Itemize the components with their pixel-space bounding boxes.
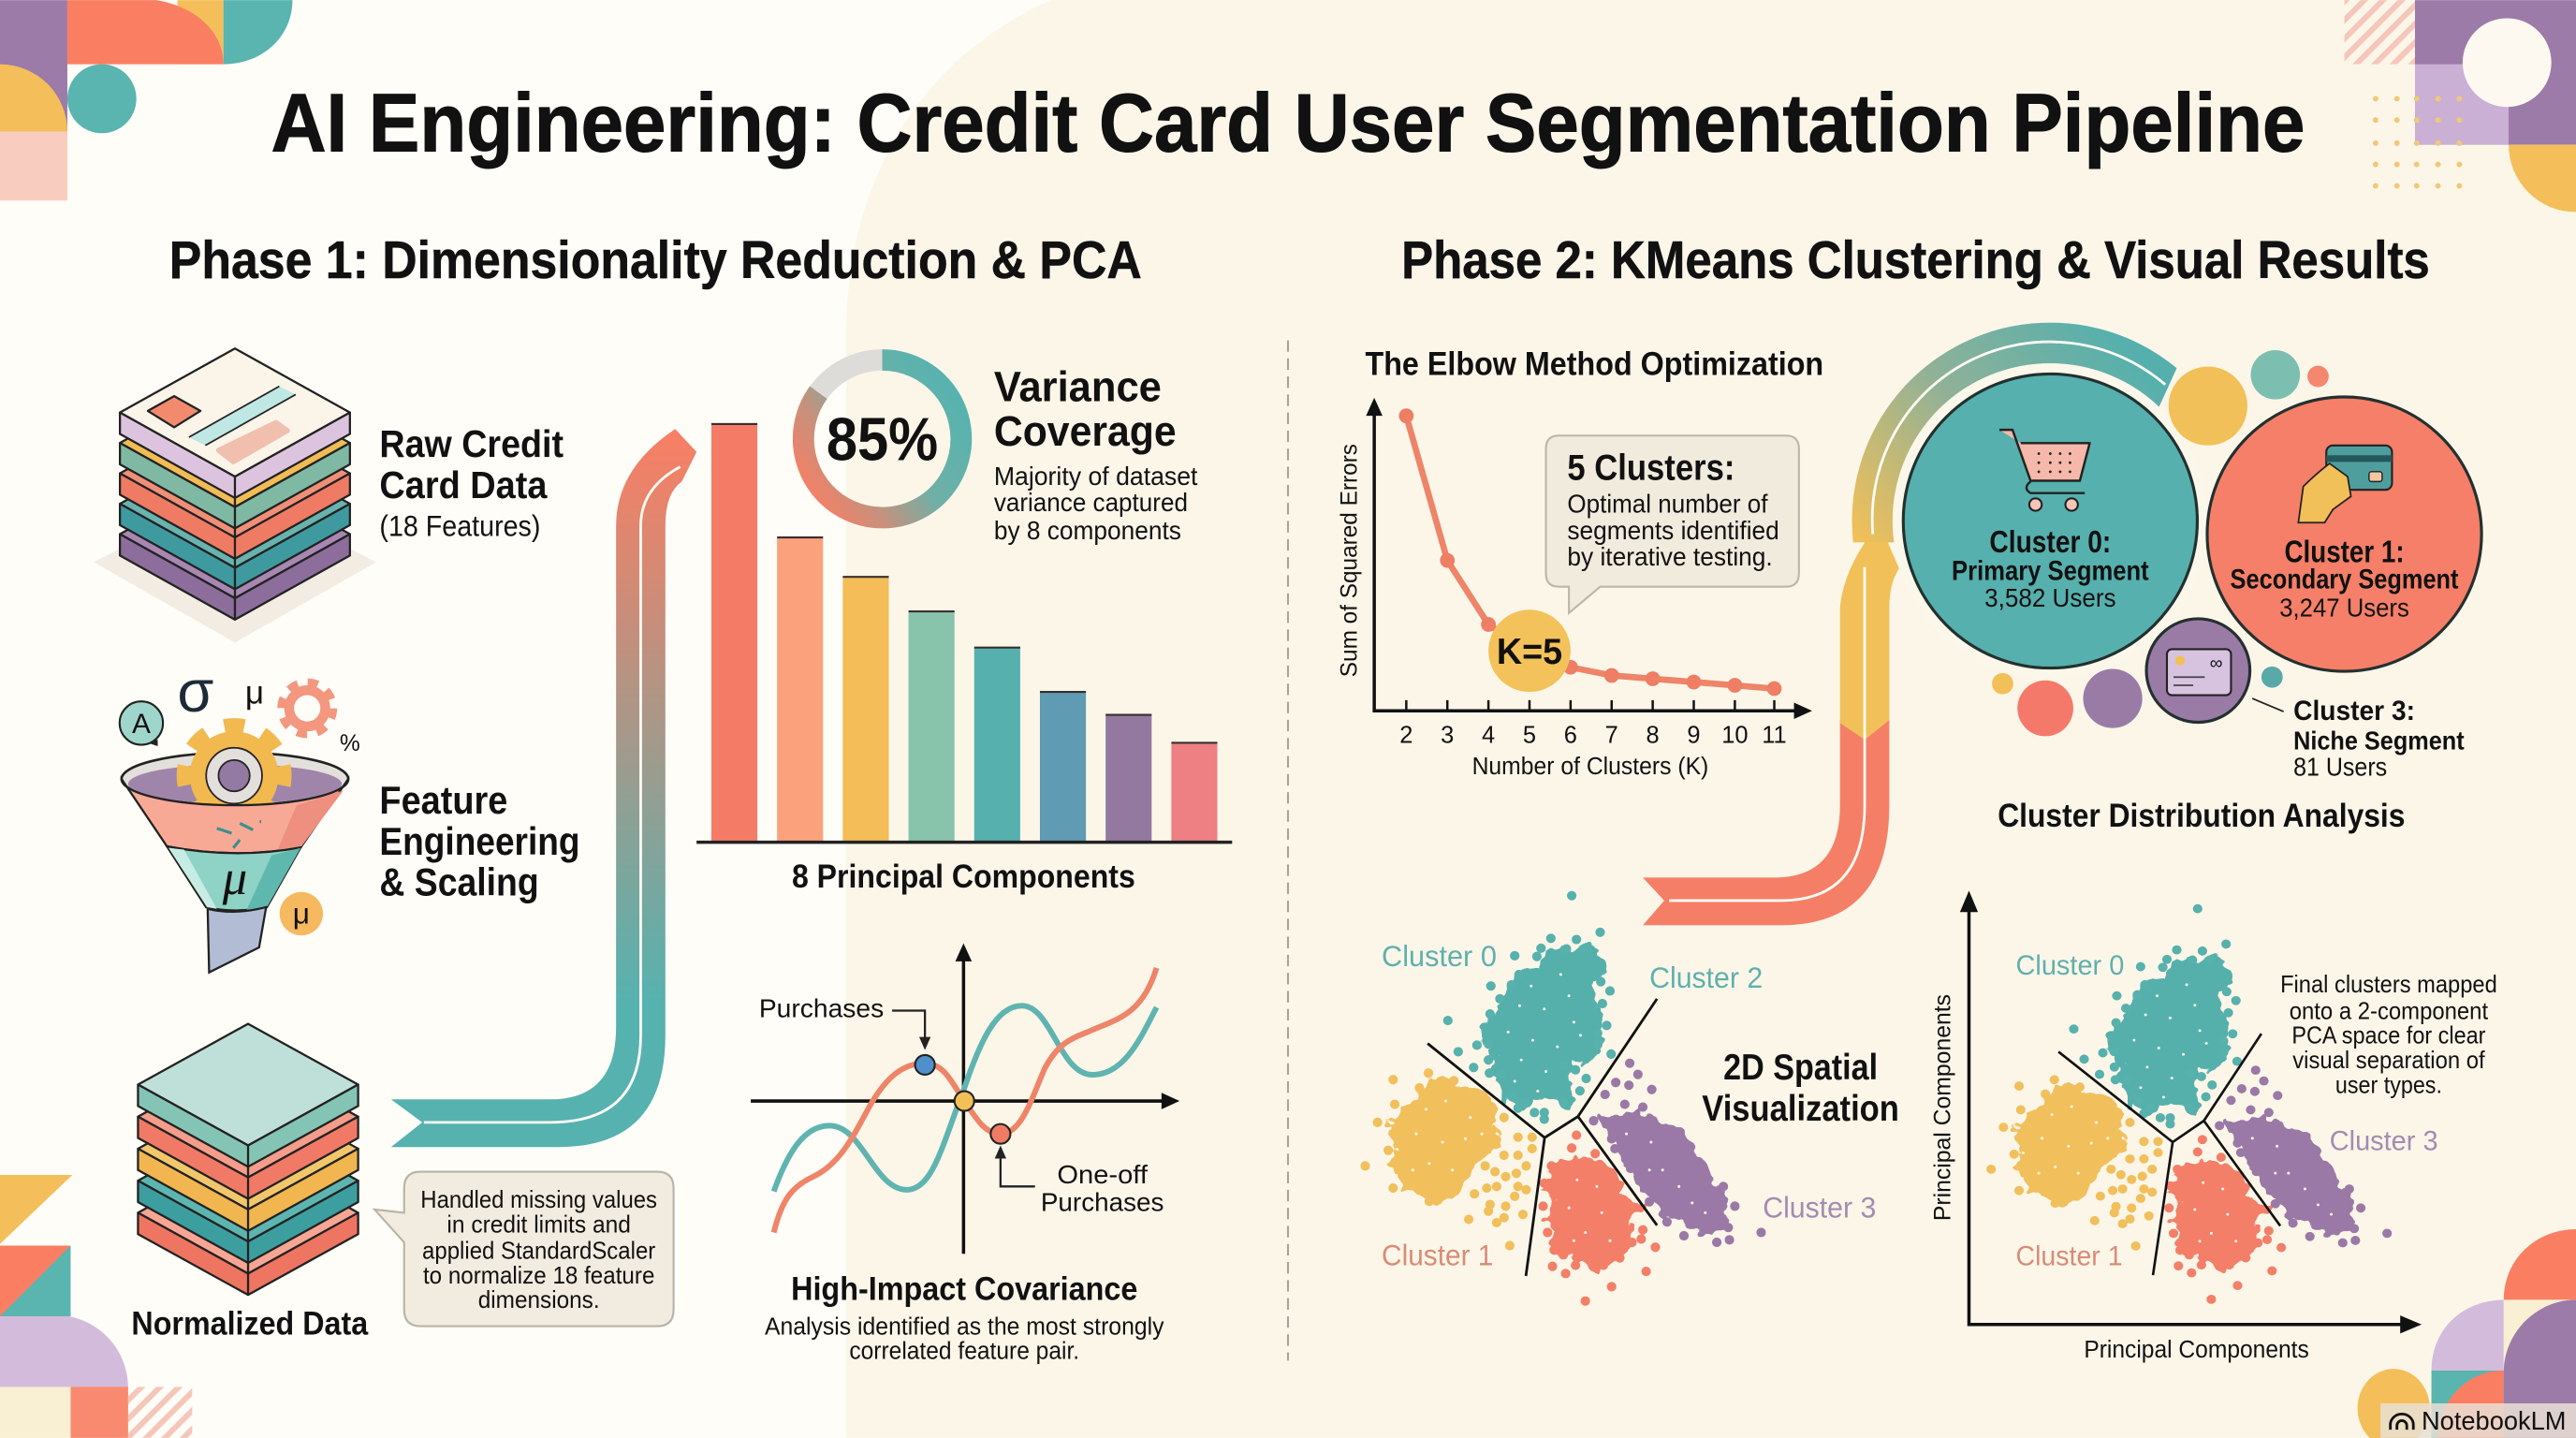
text: final clusters note xyxy=(2280,972,2497,1098)
decoration: bottom-right shapes xyxy=(2358,1229,2576,1438)
scatter plot: final clusters in PCA space: Cluster 3 xyxy=(2330,1126,2438,1157)
cluster 0 bubble xyxy=(1893,363,2208,679)
decoration: bottom-left shapes xyxy=(0,1175,192,1438)
chart: high-impact covariance: Purchases xyxy=(759,994,884,1023)
callout: 5 clusters: Optimal number of xyxy=(1567,490,1768,519)
cluster 1 bubble: 3,247 Users xyxy=(2279,593,2409,622)
icon: normalized data stack xyxy=(138,1024,359,1295)
bubble chart: cluster distribution xyxy=(1893,350,2481,736)
watermark: NotebookLM xyxy=(2380,1403,2576,1438)
label: 8 principal components: 8 Principal Components xyxy=(792,858,1135,895)
chart: elbow method: Sum of Squared Errors xyxy=(1338,444,1363,677)
label: feature engineering: Feature xyxy=(379,778,507,822)
chart: elbow method: 10 xyxy=(1721,722,1749,748)
decoration: top-right shapes xyxy=(2345,0,2576,213)
text: variance coverage: Coverage xyxy=(994,407,1177,455)
arrow: phase 1 flow xyxy=(391,429,696,1147)
arrow: phase 2 flow xyxy=(1643,323,2177,925)
callout: 5 clusters xyxy=(1546,435,1799,613)
label: normalized data: Normalized Data xyxy=(131,1305,369,1342)
scatter plot: 2d spatial: Cluster 3 xyxy=(1763,1191,1876,1225)
label: 2d spatial visualization: 2D Spatial xyxy=(1723,1048,1878,1088)
label: cluster 3: Cluster 3: xyxy=(2293,696,2415,726)
label: raw credit card data xyxy=(379,422,564,542)
watermark: NotebookLM: NotebookLM xyxy=(2422,1406,2566,1435)
callout: missing values: Handled missing values xyxy=(420,1187,657,1213)
chart: high-impact covariance: Purchases xyxy=(1041,1188,1164,1217)
text: variance coverage: by 8 components xyxy=(994,516,1181,545)
icon: feature engineering funnel: μ xyxy=(222,851,247,905)
text: variance coverage: Majority of dataset xyxy=(994,462,1198,491)
cluster 1 bubble xyxy=(2207,397,2481,671)
scatter plot: final clusters in PCA space: Cluster 1 xyxy=(2016,1241,2123,1272)
cluster 1 bubble: Cluster 1: xyxy=(2284,535,2405,569)
text: high-impact covariance: correlated feature pair. xyxy=(849,1337,1079,1365)
decorative bubbles xyxy=(1992,350,2329,736)
text: variance coverage xyxy=(994,362,1198,545)
heading: phase 1: Phase 1: Dimensionality Reduction & PCA xyxy=(169,230,1142,289)
text: final clusters note: visual separation of xyxy=(2292,1048,2485,1074)
label: raw credit card data: Raw Credit xyxy=(379,422,564,465)
icon: feature engineering funnel: σ xyxy=(177,659,213,725)
chart: elbow method: 11 xyxy=(1762,722,1787,748)
callout: missing values: applied StandardScaler xyxy=(422,1239,656,1265)
cluster 1 bubble: Secondary Segment xyxy=(2231,564,2459,594)
icon: raw data stack xyxy=(94,348,376,642)
label: 2d spatial visualization xyxy=(1702,1048,1899,1129)
label: feature engineering: Engineering xyxy=(379,819,580,863)
scatter plot: 2d spatial: Cluster 2 xyxy=(1649,961,1763,994)
label: cluster 3: Niche Segment xyxy=(2293,726,2465,755)
callout: 5 clusters: segments identified xyxy=(1567,516,1779,545)
chart: elbow method: Number of Clusters (K) xyxy=(1472,752,1708,780)
scatter plot: final clusters in PCA space: Principal Components xyxy=(2084,1335,2309,1363)
chart: elbow method: 7 xyxy=(1605,722,1618,748)
donut: variance coverage xyxy=(803,360,961,518)
cluster 0 bubble: 3,582 Users xyxy=(1984,583,2116,612)
text: final clusters note: PCA space for clear xyxy=(2291,1023,2486,1049)
label: cluster 3 xyxy=(2252,696,2465,782)
text: final clusters note: user types. xyxy=(2335,1072,2442,1098)
label: cluster 3: 81 Users xyxy=(2293,753,2387,782)
title: AI Engineering: Credit Card User Segmentation Pipeline xyxy=(271,78,2305,169)
icon: feature engineering funnel xyxy=(120,659,360,973)
cluster 3 bubble xyxy=(2146,619,2250,723)
label: feature engineering xyxy=(379,778,580,904)
chart: elbow method: 8 xyxy=(1647,722,1660,748)
text: variance coverage: Variance xyxy=(994,362,1162,410)
text: final clusters note: onto a 2-component xyxy=(2290,998,2488,1024)
callout: missing values: to normalize 18 feature xyxy=(423,1263,654,1289)
icon: feature engineering funnel: μ xyxy=(293,897,310,931)
chart: elbow method: 4 xyxy=(1482,722,1495,748)
chart: elbow method: 9 xyxy=(1687,722,1701,748)
label: cluster distribution analysis: Cluster Distribution Analysis xyxy=(1998,798,2405,834)
label: raw credit card data: (18 Features) xyxy=(379,508,540,542)
text: final clusters note: Final clusters mapped xyxy=(2280,972,2497,998)
scatter plot: final clusters in PCA space: Cluster 0 xyxy=(2016,950,2124,981)
chart: high-impact covariance xyxy=(751,944,1179,1254)
callout: missing values: dimensions. xyxy=(478,1287,600,1313)
icon: feature engineering funnel: % xyxy=(340,731,360,756)
chart: elbow method: 2 xyxy=(1399,722,1412,748)
scatter plot: 2d spatial: Cluster 0 xyxy=(1382,939,1497,973)
scatter plot: 2d spatial xyxy=(1365,896,1876,1301)
text: high-impact covariance: High-Impact Covariance xyxy=(791,1270,1137,1307)
label: 2d spatial visualization: Visualization xyxy=(1702,1089,1899,1129)
text: high-impact covariance xyxy=(765,1270,1164,1365)
decoration: top-left shapes xyxy=(0,0,292,200)
bar chart: principal components xyxy=(696,424,1232,843)
scatter plot: final clusters in PCA space: Principal Components xyxy=(1930,994,1955,1221)
cluster 3 bubble: ∞ xyxy=(2210,653,2223,673)
heading: elbow method: The Elbow Method Optimization xyxy=(1365,345,1823,382)
heading: phase 2: Phase 2: KMeans Clustering & Visual Results xyxy=(1401,230,2430,289)
label: feature engineering: & Scaling xyxy=(379,860,539,904)
icon: feature engineering funnel: μ xyxy=(245,674,264,711)
callout: missing values: in credit limits and xyxy=(446,1211,631,1238)
icon: feature engineering funnel: A xyxy=(132,709,151,740)
cluster 0 bubble: Cluster 0: xyxy=(1989,525,2111,560)
text: variance coverage: variance captured xyxy=(994,488,1188,517)
scatter plot: 2d spatial: Cluster 1 xyxy=(1382,1239,1493,1272)
callout: 5 clusters: 5 Clusters: xyxy=(1567,448,1734,489)
chart: high-impact covariance: One-off xyxy=(1057,1160,1148,1189)
chart: elbow method xyxy=(1338,398,1812,780)
scatter plot: final clusters in PCA space xyxy=(1930,890,2438,1363)
text: high-impact covariance: Analysis identified as the most strongly xyxy=(765,1312,1164,1340)
chart: elbow method: 3 xyxy=(1441,722,1454,748)
callout: 5 clusters: by iterative testing. xyxy=(1567,542,1773,571)
chart: elbow method: K=5 xyxy=(1497,632,1562,672)
cluster 0 bubble: Primary Segment xyxy=(1952,556,2149,587)
donut: variance coverage: 85% xyxy=(827,405,938,474)
label: raw credit card data: Card Data xyxy=(379,463,548,506)
chart: elbow method: 5 xyxy=(1523,722,1536,748)
chart: elbow method: 6 xyxy=(1564,722,1577,748)
callout: missing values xyxy=(374,1172,674,1327)
